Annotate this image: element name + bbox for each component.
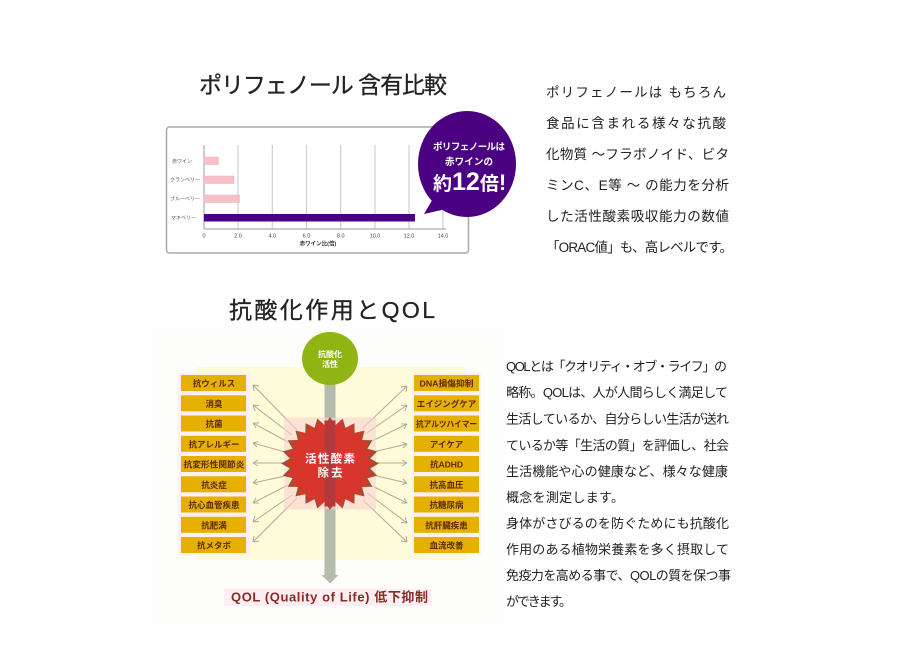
green circle: antioxidant activity (302, 332, 358, 385)
text block: QOL description: 略称。QOLは、人が人間らしく満足して (506, 385, 728, 400)
label boxes left (178, 373, 250, 555)
axis tick labels: 0 (202, 234, 206, 240)
label boxes right: 抗アルツハイマー (416, 419, 477, 429)
axis tick labels: 14.0 (438, 234, 448, 240)
label boxes left: 抗アレルギー (188, 439, 240, 449)
axis tick labels: 6.0 (303, 234, 310, 240)
label boxes right: アイケア (430, 439, 464, 449)
text block: polyphenol description: ポリフェノールは もちろん (546, 85, 726, 100)
text block: QOL description: ているか等「生活の質」を評価し、社会 (506, 438, 729, 453)
axis tick labels (202, 234, 448, 240)
text block: polyphenol description (546, 85, 733, 255)
yellow background panel (196, 367, 465, 560)
axis tick labels: 12.0 (404, 234, 414, 240)
green circle: antioxidant activity: 抗酸化 (318, 349, 342, 359)
title: antioxidant action and QOL: 抗酸化作用とQOL (229, 297, 435, 323)
category labels: マキベリー (171, 216, 196, 222)
label boxes right: 血流改善 (429, 540, 464, 550)
text block: polyphenol description: 化物質 ～フラボノイド、ビタ (546, 147, 729, 162)
grid lines and axes (204, 145, 446, 229)
axis title: 赤ワイン比(倍) (300, 240, 336, 248)
label boxes right: 抗高血圧 (429, 480, 464, 490)
text block: QOL description: 概念を測定します。 (506, 490, 624, 505)
axis tick labels: 2.0 (234, 234, 242, 240)
starburst: active oxygen removal (281, 417, 379, 510)
label boxes left: 消臭 (205, 399, 223, 409)
label boxes left: 抗ウィルス (193, 378, 235, 388)
category labels: 赤ワイン (172, 159, 192, 165)
vertical gray arrow (322, 380, 338, 584)
text block: QOL description: QOLとは「クオリティ・オブ・ライフ」の (506, 359, 727, 374)
label boxes left: 抗メタボ (197, 540, 231, 550)
callout: about 12 times: ポリフェノールは (433, 142, 505, 153)
label boxes left: 抗心血管疾患 (188, 500, 240, 510)
axis tick labels: 4.0 (268, 234, 276, 240)
text block: QOL description: 免疫力を高める事で、QOLの質を保つ事 (506, 568, 731, 583)
bar: maqui berry (204, 214, 415, 222)
label boxes right (412, 373, 481, 555)
text block: QOL description: 身体がさびるのを防ぐためにも抗酸化 (506, 516, 729, 531)
starburst: active oxygen removal: 除去 (318, 466, 343, 480)
axis tick labels: 10.0 (370, 234, 380, 240)
axis tick labels: 8.0 (337, 234, 345, 240)
bar: cranberry (204, 176, 234, 184)
category labels (170, 159, 200, 222)
starburst: active oxygen removal: 活性酸素 (305, 452, 356, 466)
label boxes left: 抗菌 (205, 419, 223, 429)
label boxes right: DNA損傷抑制 (420, 378, 474, 388)
callout: about 12 times (418, 111, 516, 217)
text block: polyphenol description: ミンC、E等 ～ の能力を分析 (546, 177, 729, 193)
arrows left (253, 385, 297, 542)
text block: polyphenol description: 「ORAC値」も、高レベルです。 (546, 239, 733, 255)
category labels: クランベリー (170, 178, 200, 184)
text block: QOL description: 生活機能や心の健康など、様々な健康 (506, 464, 728, 479)
label boxes right: 抗糖尿病 (429, 500, 464, 510)
category labels: ブルーベリー (170, 196, 200, 202)
callout: about 12 times: 赤ワインの (445, 156, 493, 168)
title: polyphenol comparison: ポリフェノール 含有比較 (199, 72, 447, 98)
bar chart: polyphenol content (166, 127, 468, 253)
bar: red wine (204, 157, 218, 164)
label boxes right: 抗肝臓疾患 (425, 520, 468, 530)
callout: about 12 times: 約12倍! (433, 168, 506, 196)
text block: polyphenol description: した活性酸素吸収能力の数値 (546, 209, 729, 224)
label boxes right: エイジングケア (417, 399, 477, 409)
text block: QOL description: 生活しているか、自分らしい生活が送れ (506, 412, 729, 426)
text block: QOL description: ができます。 (506, 594, 572, 609)
diagram: antioxidant activity and QOL (150, 328, 505, 625)
chart frame (166, 127, 468, 253)
label boxes left: 抗肥満 (201, 520, 227, 530)
label boxes right: 抗ADHD (430, 460, 463, 470)
text block: polyphenol description: 食品に含まれる様々な抗酸 (546, 116, 726, 131)
bar: blueberry (204, 195, 240, 202)
green circle: antioxidant activity: 活性 (322, 359, 338, 369)
arrows right (363, 386, 407, 542)
label boxes left: 抗変形性関節炎 (184, 460, 245, 470)
text block: QOL description: 作用のある植物栄養素を多く摂取して (506, 542, 729, 557)
bottom label: QOL suppression: QOL (Quality of Life) 低下抑制 (231, 590, 428, 604)
text block: QOL description (506, 359, 731, 609)
label boxes left: 抗炎症 (201, 480, 227, 490)
